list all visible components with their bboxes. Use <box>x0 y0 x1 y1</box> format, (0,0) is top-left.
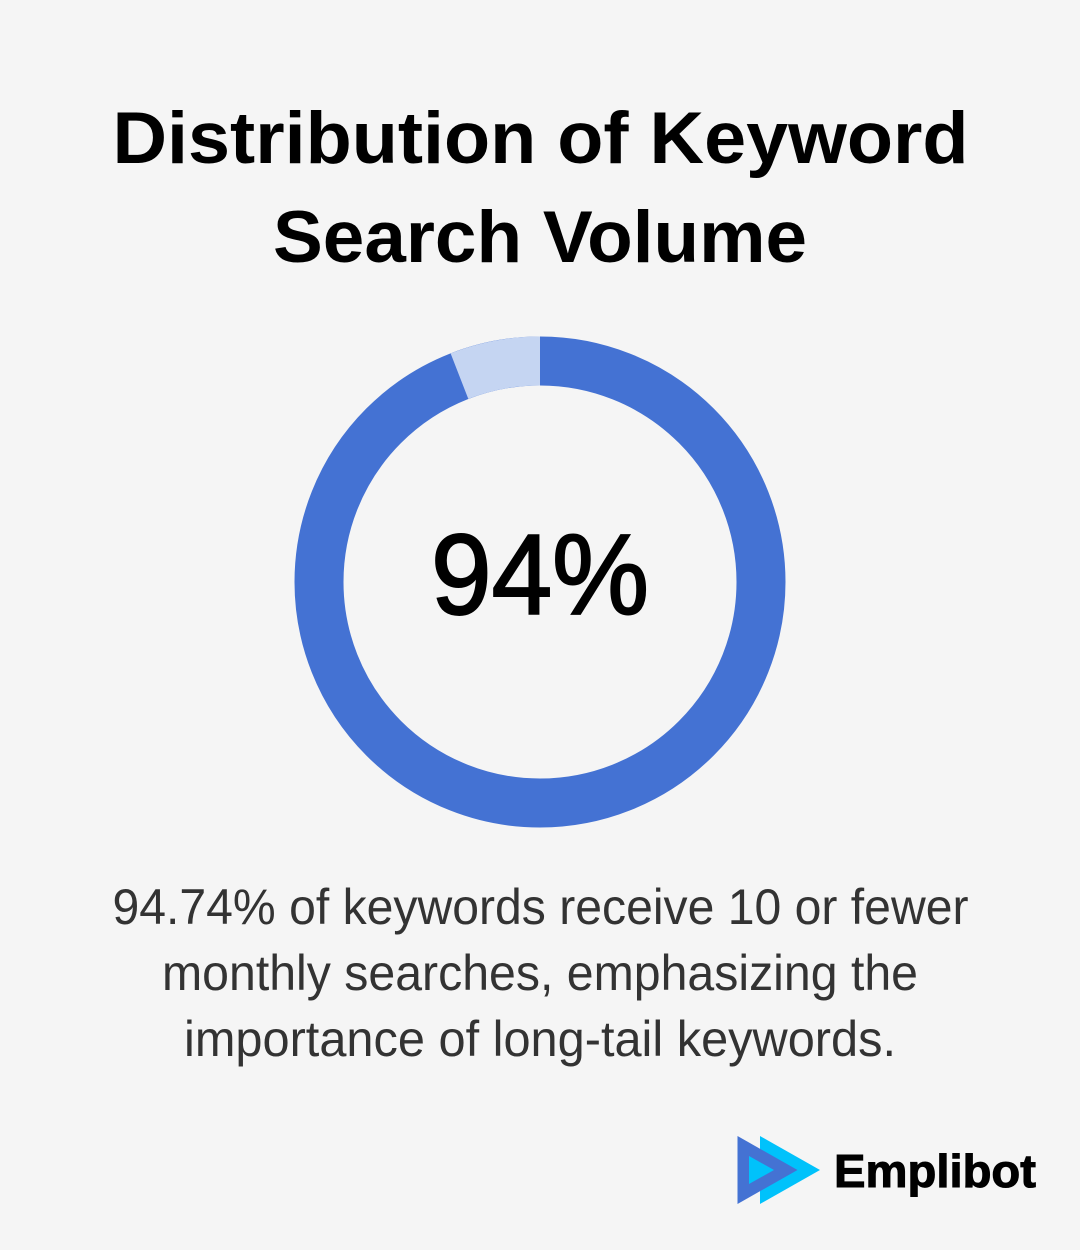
logo: Emplibot <box>738 1136 1036 1204</box>
title <box>112 98 968 278</box>
donut segment: remaining 6% <box>451 336 540 399</box>
description text: 94.74% of keywords receive 10 or fewer <box>112 879 968 935</box>
description text: monthly searches, emphasizing the <box>162 945 918 1001</box>
center value: 94% <box>431 512 649 639</box>
donut chart: 94% <box>319 336 761 803</box>
description text: importance of long-tail keywords. <box>184 1011 896 1067</box>
icon: play triangles <box>738 1136 820 1204</box>
logo wordmark: Emplibot <box>834 1145 1036 1197</box>
title: Search Volume <box>273 197 807 278</box>
description text <box>112 879 968 1067</box>
title: Distribution of Keyword <box>112 98 968 179</box>
